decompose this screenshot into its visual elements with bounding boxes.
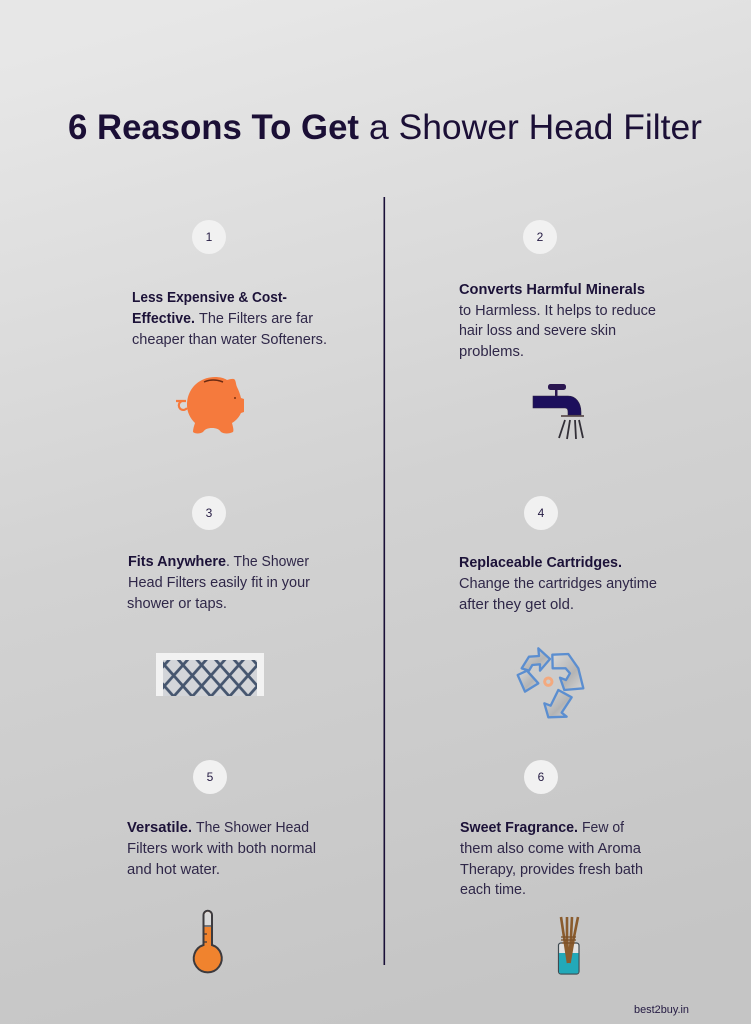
text: reason 2: to Harmless. It helps to reduce [459, 303, 656, 319]
text: reason 4: Change the cartridges anytime [459, 576, 657, 592]
number badge 5 [193, 760, 227, 794]
title: 6 Reasons To Get [68, 108, 359, 147]
text: reason 6: Therapy, provides fresh bath [460, 862, 643, 878]
center divider [384, 197, 385, 965]
number badge 4: 4 [538, 506, 545, 520]
text: reason 1: Effective. [132, 311, 195, 327]
text: reason 5: and hot water. [127, 862, 220, 878]
panel: reason 1 [132, 220, 327, 434]
text: reason 1 [132, 290, 327, 348]
text: reason 1: The Filters are far [199, 311, 313, 327]
text: reason 3: . The Shower [226, 554, 309, 570]
number badge 4 [524, 496, 558, 530]
number badge 1: 1 [206, 230, 213, 244]
panel: reason 4 [459, 496, 657, 717]
text: reason 3: Head Filters easily fit in your [128, 575, 310, 591]
panel: reason 5 [127, 760, 316, 972]
text: reason 5: The Shower Head [196, 820, 309, 836]
text: reason 4: Replaceable Cartridges. [459, 555, 622, 571]
icon: thermometer [194, 911, 222, 972]
text: reason 2: problems. [459, 344, 524, 360]
number badge 3 [192, 496, 226, 530]
text: reason 3: shower or taps. [127, 596, 227, 612]
text: reason 1: cheaper than water Softeners. [132, 332, 327, 348]
text: reason 5: Filters work with both normal [127, 841, 316, 857]
icon: recycle arrows [518, 648, 583, 717]
text: reason 4 [459, 555, 657, 613]
text: reason 5: Versatile. [127, 820, 192, 836]
panel: reason 2 [459, 220, 656, 439]
panel: reason 3 [127, 496, 310, 696]
panel: reason 6 [460, 760, 643, 974]
text: reason 6: each time. [460, 882, 526, 898]
number badge 5: 5 [207, 770, 214, 784]
number badge 2: 2 [537, 230, 544, 244]
number badge 1 [192, 220, 226, 254]
text: reason 6: Few of [582, 820, 625, 836]
text: reason 6 [460, 820, 643, 898]
number badge 3: 3 [206, 506, 213, 520]
text: reason 2 [459, 282, 656, 360]
icon: piggy bank [176, 377, 244, 434]
number badge 2 [523, 220, 557, 254]
number badge 6: 6 [538, 770, 545, 784]
text: reason 3: Fits Anywhere [128, 554, 226, 570]
text: reason 2: Converts Harmful Minerals [459, 282, 645, 298]
title [68, 108, 702, 147]
icon: faucet [533, 384, 584, 439]
title: a Shower Head Filter [369, 108, 702, 147]
text: reason 5 [127, 820, 316, 878]
text: reason 6: Sweet Fragrance. [460, 820, 578, 836]
text: reason 1: Less Expensive & Cost- [132, 290, 287, 306]
number badge 6 [524, 760, 558, 794]
text: reason 3 [127, 554, 310, 612]
text: reason 6: them also come with Aroma [460, 841, 642, 857]
text: reason 4: after they get old. [459, 597, 574, 613]
text: reason 2: hair loss and severe skin [459, 323, 616, 339]
icon: filter mesh [156, 653, 264, 696]
footer credit: best2buy.in [634, 1004, 689, 1016]
icon: reed diffuser [558, 917, 579, 974]
